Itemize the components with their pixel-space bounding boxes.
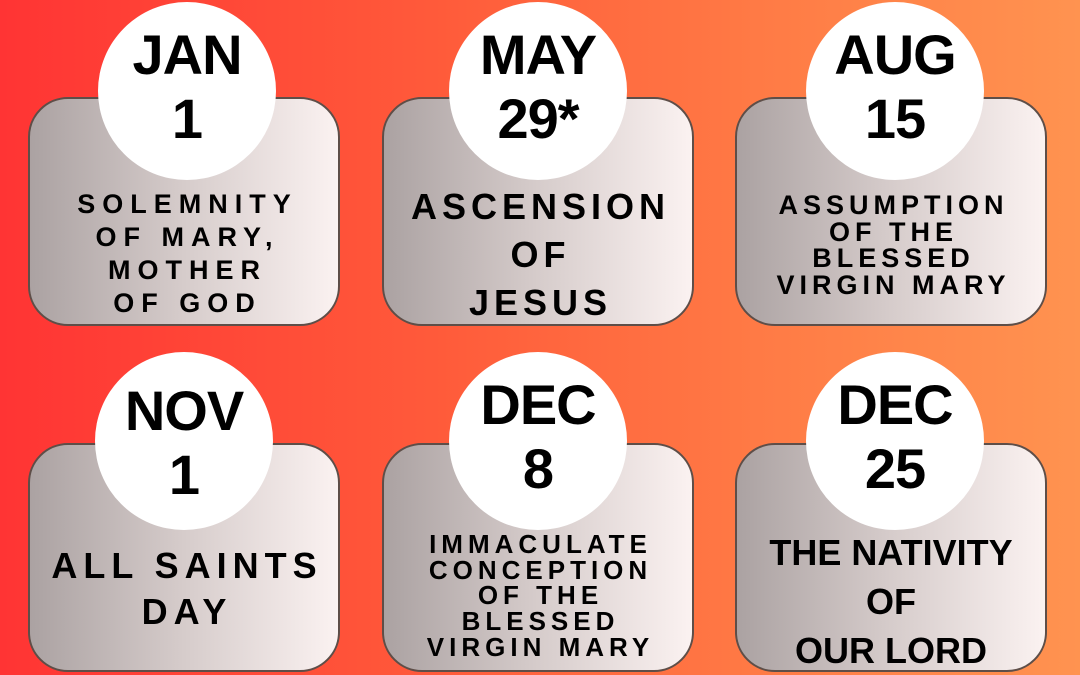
text: Assumption: VIRGIN MARY <box>776 270 1010 300</box>
text: Ascension of Jesus <box>411 186 670 323</box>
card: Dec 25 <box>735 443 1047 672</box>
card: Aug 15 <box>735 97 1047 326</box>
date: DEC 8: DEC <box>480 373 596 436</box>
text: Ascension of Jesus: JESUS <box>469 282 612 323</box>
date: AUG 15: AUG <box>834 23 956 86</box>
text: Solemnity of Mary: OF MARY, <box>96 222 280 252</box>
text: Ascension of Jesus: OF <box>510 234 570 275</box>
text: Immaculate Conception <box>427 529 654 662</box>
date: MAY 29* <box>480 23 596 150</box>
date: NOV 1: 1 <box>169 443 199 506</box>
text: Assumption: BLESSED <box>812 243 975 273</box>
text: All Saints Day: ALL SAINTS <box>51 545 323 586</box>
date: MAY 29*: 29* <box>497 87 579 150</box>
date: NOV 1: NOV <box>125 379 243 442</box>
circle: Aug 15 <box>806 2 984 180</box>
text: Nativity: THE NATIVITY <box>769 532 1013 573</box>
circle: Dec 25 <box>806 352 984 530</box>
text: Assumption: ASSUMPTION <box>778 190 1008 220</box>
date: AUG 15: 15 <box>865 87 925 150</box>
text: Solemnity of Mary: OF GOD <box>113 288 262 318</box>
text: Assumption: OF THE <box>829 216 958 246</box>
card: Nov 1 <box>28 443 340 672</box>
date: JAN 1: JAN <box>132 23 242 86</box>
text: Solemnity of Mary: SOLEMNITY <box>77 189 298 219</box>
text: All Saints Day: DAY <box>142 591 232 632</box>
date: JAN 1 <box>132 23 242 150</box>
circle: Jan 1 <box>98 2 276 180</box>
text: Immaculate Conception: CONCEPTION <box>429 555 652 585</box>
text: Immaculate Conception: VIRGIN MARY <box>427 632 654 662</box>
date: NOV 1 <box>125 379 244 506</box>
date: DEC 8: 8 <box>523 437 553 500</box>
circle: May 29 <box>449 2 627 180</box>
date: DEC 25: DEC <box>837 373 953 436</box>
card: May 29 <box>382 97 694 326</box>
text: Ascension of Jesus: ASCENSION <box>411 186 670 227</box>
text: Assumption <box>776 190 1010 300</box>
text: Nativity: OF <box>866 581 916 622</box>
date: AUG 15 <box>834 23 956 150</box>
text: Immaculate Conception: OF THE <box>478 580 603 610</box>
text: Immaculate Conception: IMMACULATE <box>429 529 652 559</box>
circle: Dec 8 <box>449 352 627 530</box>
card: Jan 1 <box>28 97 340 326</box>
text: Solemnity of Mary <box>77 189 298 318</box>
date: MAY 29*: MAY <box>480 23 596 86</box>
text: Immaculate Conception: BLESSED <box>462 606 619 636</box>
text: Nativity <box>769 532 1013 671</box>
date: DEC 8 <box>480 373 596 500</box>
date: DEC 25 <box>837 373 953 500</box>
text: Solemnity of Mary: MOTHER <box>108 255 267 285</box>
date: JAN 1: 1 <box>172 87 202 150</box>
text: All Saints Day <box>51 545 323 632</box>
date: DEC 25: 25 <box>865 437 925 500</box>
circle: Nov 1 <box>95 352 273 530</box>
text: Nativity: OUR LORD <box>795 630 987 671</box>
card: Dec 8 <box>382 443 694 672</box>
